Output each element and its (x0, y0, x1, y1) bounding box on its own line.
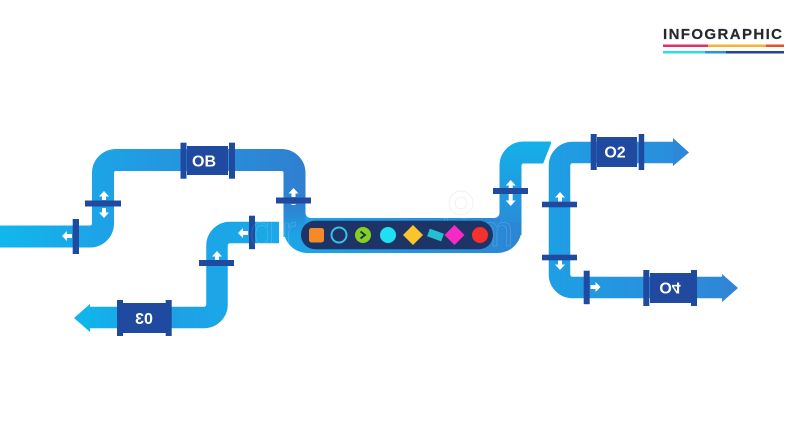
icon: teal tilted rectangle (427, 229, 444, 241)
arrow: up (99, 191, 109, 200)
arrow: up (555, 192, 565, 202)
valve: OB (180, 143, 235, 179)
arrow: up near drop (288, 188, 298, 197)
arrow: up (212, 251, 222, 260)
arrow: up (506, 180, 516, 188)
flange: horizontal (199, 260, 234, 266)
central pipe reservoir (284, 205, 522, 253)
flange: vertical (584, 271, 590, 304)
valve: OB: OB (192, 154, 216, 170)
watermark: dreamstime (250, 207, 545, 256)
flange: right drop (276, 198, 311, 204)
flange: riser (85, 200, 121, 206)
valve: 02 (591, 134, 644, 170)
title (663, 26, 784, 54)
arrow: down (99, 208, 109, 218)
icon: red circle (472, 227, 488, 243)
arrow: left (238, 228, 248, 238)
icon: cyan ring (332, 228, 346, 242)
icon: cyan circle (380, 227, 396, 243)
icon: orange square (309, 228, 324, 242)
valve: 03: 03 (135, 311, 153, 328)
valve: 02: O2 (604, 144, 626, 162)
title: INFOGRAPHIC (663, 26, 782, 43)
arrow head: 07 (722, 274, 738, 302)
arrow head: 02 (673, 138, 689, 166)
arrow head: 03 (74, 304, 90, 332)
valve: 07: O4 (659, 278, 681, 296)
arrow: right (590, 282, 600, 292)
icon: magenta diamond (444, 225, 464, 245)
dark icon tray (301, 221, 493, 249)
flange: lower horizontal (542, 255, 577, 260)
valve: 07 (643, 270, 697, 306)
icon: yellow diamond (403, 225, 423, 245)
flange: upper horizontal (542, 202, 577, 207)
flange: riser (493, 188, 528, 194)
valve: 03 (117, 300, 172, 336)
arrow: down near drop (288, 204, 298, 214)
pipe: 03 output line (74, 216, 279, 332)
pipe: right branch (542, 138, 738, 304)
flange: left vertical (73, 219, 79, 254)
icon row (309, 225, 488, 245)
icon: green circle (355, 227, 371, 243)
arrow: left (62, 231, 72, 241)
arrow: down (506, 194, 516, 206)
arrow: down (555, 260, 565, 270)
flange: vertical (249, 216, 255, 249)
pipe: OB input line (0, 160, 311, 254)
pipe: upper right riser (493, 141, 553, 235)
